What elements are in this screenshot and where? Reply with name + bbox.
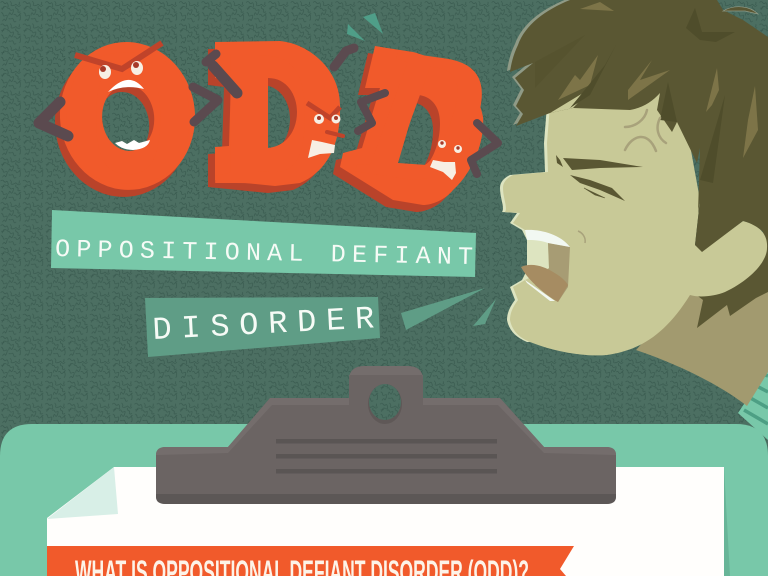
clipboard board: [0, 424, 768, 576]
title: ODD angry letters: [39, 0, 520, 229]
upper teeth: [525, 230, 570, 247]
tongue: [521, 265, 568, 302]
face light outline: [500, 100, 597, 342]
orange heading banner: [47, 546, 574, 576]
boy shouting: [500, 0, 768, 440]
letter D with fist raised: D: [212, 0, 343, 229]
hair dark shadows: [535, 8, 735, 183]
clip grip lines: [276, 439, 497, 474]
label: Oppositional Defiant: [51, 210, 476, 277]
clipboard clip: [156, 366, 616, 504]
face: [503, 80, 767, 355]
hair: [510, 0, 768, 252]
hair highlights: [558, 2, 758, 158]
hair light outline: [507, 0, 617, 125]
cheek crease: [578, 231, 585, 243]
back hair below ear: [690, 230, 768, 328]
shirt collar: [738, 366, 768, 440]
skin wedge at the hairline: [550, 87, 593, 113]
hair tuft at the crown: [723, 7, 758, 14]
letter O with angry face: O: [58, 7, 198, 225]
lower teeth: [525, 280, 555, 301]
label: Disorder: DISORDER: [152, 300, 375, 349]
letter D tilted with angry face: D: [338, 9, 520, 226]
anger lines on forehead: [625, 110, 666, 151]
mouth interior: [535, 243, 570, 302]
accent marks above the letters: [347, 13, 383, 41]
label: Oppositional Defiant: OPPOSITIONAL DEFIANT: [55, 235, 473, 272]
squinting eye and brow: [556, 155, 643, 201]
clip hole: [368, 384, 402, 424]
folded paper corner: [47, 467, 118, 519]
neck: [636, 250, 768, 406]
speech lines from mouth: [401, 288, 496, 330]
letter arms: [39, 48, 498, 174]
sheet of paper: [47, 467, 730, 576]
